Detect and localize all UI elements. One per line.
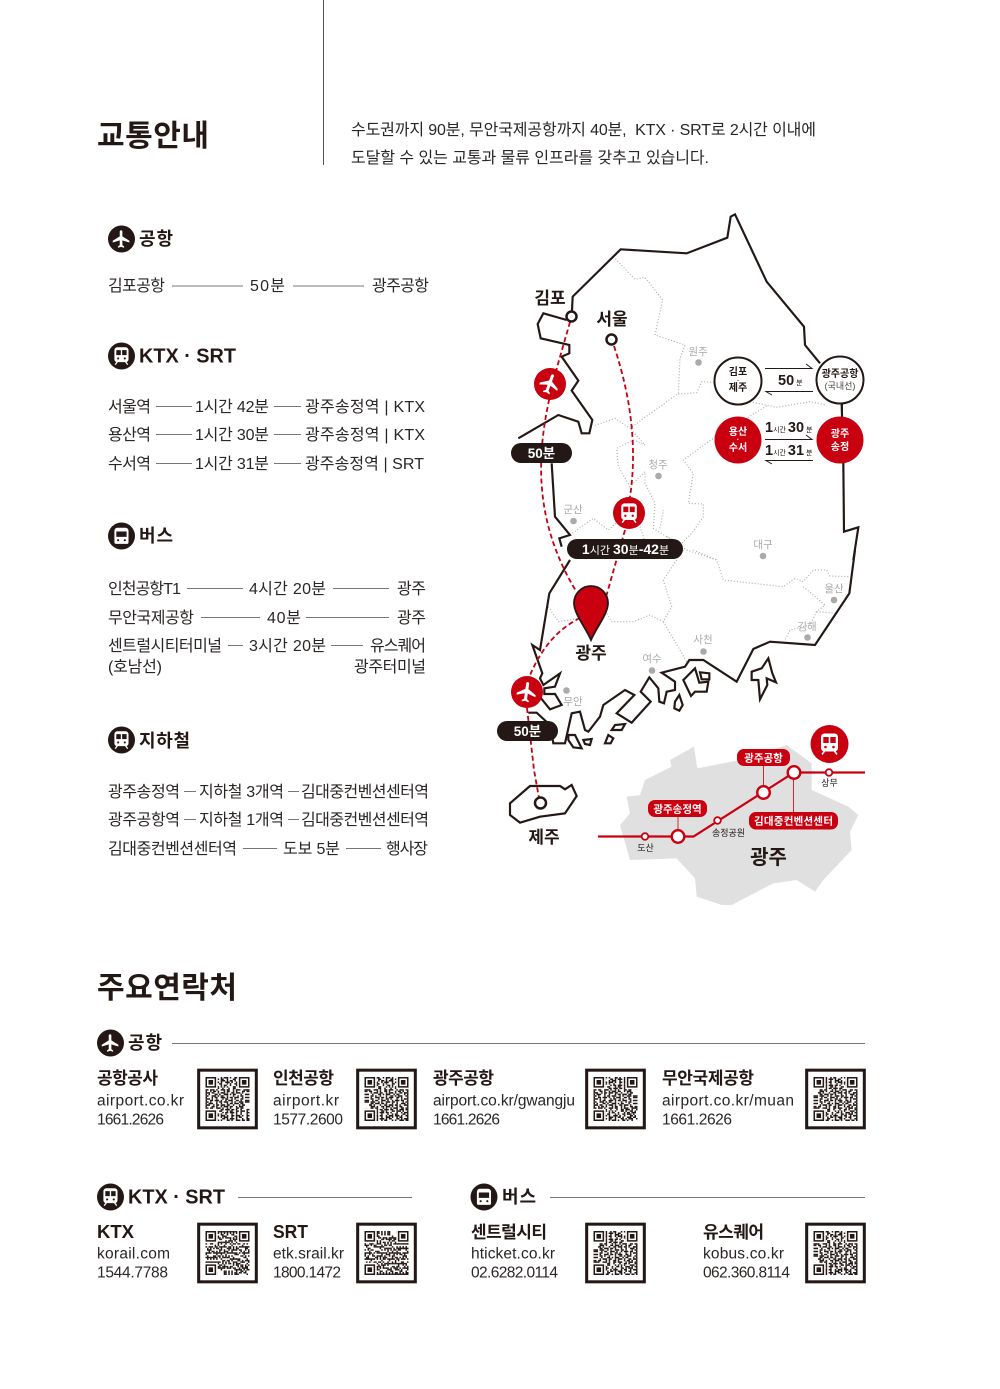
routes list: 지하철 3개역 xyxy=(199,783,284,801)
contact: 유스퀘어: kobus.co.kr xyxy=(703,1246,784,1262)
city markers: grey dots and labels: 사천 xyxy=(693,634,713,646)
marker: 서울: 서울 xyxy=(596,310,628,329)
marker: 서울 xyxy=(596,310,628,344)
marker: 광주 pin: 광주 xyxy=(575,644,607,663)
circle: 광주 송정 xyxy=(816,416,864,464)
routes list: 김대중컨벤션센터역 xyxy=(301,783,429,801)
routes list: 4시간 20분 xyxy=(249,580,326,598)
routes list: 서울역 xyxy=(108,398,151,416)
routes list: 광주공항역 xyxy=(108,811,180,829)
heading: 버스: 버스 xyxy=(502,1187,536,1207)
routes list: 광주송정역 | KTX xyxy=(305,398,425,416)
circle: 김포 제주: · xyxy=(736,375,740,385)
callout: 광주송정역 xyxy=(648,800,707,817)
panel: travel time key xyxy=(714,356,864,464)
city markers: grey dots and labels xyxy=(563,346,844,708)
qr: 유스퀘어 xyxy=(807,1224,864,1282)
contact: 공항공사: airport.co.kr xyxy=(97,1092,184,1110)
contact: 센트럴시티: 센트럴시티 xyxy=(471,1223,547,1242)
badge: 1시간 30분-42분: 1시간 30분-42분 xyxy=(582,541,669,557)
icon: train xyxy=(97,1184,124,1210)
routes list: 1시간 30분 xyxy=(195,426,269,444)
contact: 센트럴시티: hticket.co.kr xyxy=(471,1246,555,1262)
contact: 공항공사: 1661.2626 xyxy=(97,1112,164,1128)
heading: 공항: 공항 xyxy=(139,229,173,249)
connector segment xyxy=(841,403,843,420)
callout: 김대중컨벤션센터: 김대중컨벤션센터 xyxy=(754,814,833,828)
contact: KTX: korail.com xyxy=(97,1246,170,1262)
station labels: 송정공원 xyxy=(712,828,745,838)
qr: SRT xyxy=(358,1224,415,1282)
Gimpo to Gwangju coast outline xyxy=(518,214,858,560)
routes list: 유스퀘어 xyxy=(370,637,426,655)
panel: bus routes xyxy=(108,522,426,676)
label: 광주: 광주 xyxy=(750,846,787,869)
contact: KTX: KTX xyxy=(97,1221,135,1242)
icon: bus xyxy=(470,1184,498,1210)
intro text: 도달할 수 있는 교통과 물류 인프라를 갖추고 있습니다. xyxy=(351,149,709,167)
badge: 50분 north xyxy=(511,443,572,463)
badge: 50분 north: 50분 xyxy=(528,446,555,461)
marker: 김포: 김포 xyxy=(534,289,566,308)
heading: 버스: 버스 xyxy=(139,526,173,546)
city markers: grey dots and labels: 대구 xyxy=(753,539,773,551)
circle: 용산 수서: 용산 xyxy=(729,425,747,438)
station labels: 상무 xyxy=(821,778,838,788)
icon: plane xyxy=(108,226,135,252)
title: 주요연락처: 주요연락처 xyxy=(97,972,237,1005)
panel: Gwangju transit map xyxy=(598,725,865,905)
routes list: 광주 xyxy=(397,609,426,627)
panel: KTX SRT routes xyxy=(108,342,425,473)
intro text xyxy=(351,121,816,167)
contact: 유스퀘어: 유스퀘어 xyxy=(703,1223,764,1242)
divider xyxy=(550,1196,865,1198)
circle: 광주공항 국내선: (국내선) xyxy=(825,381,855,391)
qr: 광주공항 xyxy=(587,1070,644,1128)
duration: 1시간 31분: 1시간 31 분 xyxy=(765,443,813,459)
routes list: 무안국제공항 xyxy=(108,609,194,627)
routes list: 1시간 31분 xyxy=(195,455,269,473)
routes list xyxy=(108,580,426,676)
contact: 센트럴시티 xyxy=(471,1223,558,1282)
marker: 광주 pin xyxy=(574,586,608,663)
routes list: 지하철 1개역 xyxy=(199,811,284,829)
circle: 김포 제주: 제주 xyxy=(729,381,747,394)
routes list: 수서역 xyxy=(108,455,151,473)
circle: 광주 송정: 광주 xyxy=(831,428,849,440)
arrows and durations xyxy=(765,364,813,464)
city markers: grey dots and labels: 무안 xyxy=(563,696,583,708)
routes list: 인천공항T1 xyxy=(108,580,181,598)
routes list: 용산역 xyxy=(108,426,151,444)
contact: 인천공항 xyxy=(273,1069,343,1128)
route: 김포공항 to 광주공항: 김포공항 xyxy=(108,277,165,295)
panel: subway routes xyxy=(108,726,429,858)
route: 김포공항 to 광주공항 xyxy=(108,277,429,295)
contact: 무안국제공항: airport.co.kr/muan xyxy=(662,1092,794,1110)
station labels: 도산 xyxy=(637,843,654,853)
map regional boundaries, upper xyxy=(570,257,827,560)
icon: red plane south xyxy=(511,676,543,708)
contact: KTX xyxy=(97,1221,170,1282)
routes list: 광주송정역 | KTX xyxy=(305,426,425,444)
divider xyxy=(172,1042,865,1044)
icon: red train xyxy=(613,497,645,529)
heading: 지하철: 지하철 xyxy=(139,731,190,751)
contact: 유스퀘어 xyxy=(703,1223,790,1282)
marker: 김포 xyxy=(534,289,576,322)
callout: 광주공항 xyxy=(737,749,790,766)
circle: 김포 제주: 김포 xyxy=(729,366,747,378)
city markers: grey dots and labels: 군산 xyxy=(563,504,583,516)
qr: 공항공사 xyxy=(199,1070,256,1128)
routes list: (호남선) xyxy=(108,658,162,676)
contact: 인천공항: 1577.2600 xyxy=(273,1112,343,1128)
contact: SRT: 1800.1472 xyxy=(273,1264,341,1282)
panel: bus contacts xyxy=(470,1184,865,1282)
contact: 무안국제공항: 무안국제공항 xyxy=(662,1069,754,1088)
circle: 광주 송정: 송정 xyxy=(831,441,849,453)
routes list: 센트럴시티터미널 xyxy=(108,637,222,655)
contact: 공항공사 xyxy=(97,1069,184,1128)
icon: plane xyxy=(97,1030,124,1056)
routes list: 행사장 xyxy=(386,840,428,858)
route: 김포공항 to 광주공항: 광주공항 xyxy=(372,277,429,295)
qr: 무안국제공항 xyxy=(807,1070,864,1128)
contact: SRT: etk.srail.kr xyxy=(273,1246,344,1262)
qr: 센트럴시티 xyxy=(587,1224,644,1282)
badge: 50분 south xyxy=(497,721,558,741)
callout: 김대중컨벤션센터 xyxy=(749,812,838,830)
routes list xyxy=(108,398,425,473)
heading: KTX · SRT: KTX · SRT xyxy=(128,1186,225,1208)
qr: 인천공항 xyxy=(358,1070,415,1128)
city markers: grey dots and labels: 청주 xyxy=(648,459,668,471)
marker: 제주 xyxy=(528,798,560,847)
callout: 광주송정역: 광주송정역 xyxy=(653,802,702,816)
callout: 광주공항: 광주공항 xyxy=(744,752,783,764)
routes list: 광주송정역 xyxy=(108,783,180,801)
icon: bus xyxy=(108,522,135,550)
city markers: grey dots and labels: 김해 xyxy=(797,620,817,633)
contact: 광주공항: 1661.2626 xyxy=(433,1112,500,1128)
duration: 1시간 30분: 1시간 30 분 xyxy=(765,420,813,436)
contact: SRT: SRT xyxy=(273,1221,309,1242)
contact: 무안국제공항 xyxy=(662,1069,794,1128)
title: 교통안내: 교통안내 xyxy=(97,120,209,153)
routes list xyxy=(108,783,429,858)
stations xyxy=(642,766,832,843)
routes list: 3시간 20분 xyxy=(249,637,326,655)
contact: KTX: 1544.7788 xyxy=(97,1264,168,1282)
circle: 광주공항 국내선: 광주공항 xyxy=(822,367,858,380)
map regional boundaries, lower xyxy=(548,550,850,662)
Gwangju city shape xyxy=(620,745,858,905)
routes list: 도보 5분 xyxy=(283,841,340,858)
contact: SRT xyxy=(273,1221,344,1282)
heading: 공항: 공항 xyxy=(128,1033,162,1053)
routes list: 40분 xyxy=(267,610,301,627)
icon: red plane north xyxy=(534,368,566,400)
icon: train xyxy=(108,342,135,370)
badge: 50분 south: 50분 xyxy=(514,724,541,739)
icon: subway red xyxy=(810,725,848,763)
divider xyxy=(238,1196,412,1198)
red dashed routes xyxy=(527,322,633,798)
icon: subway xyxy=(108,726,135,754)
south coast and islands xyxy=(510,550,855,823)
routes list: 광주터미널 xyxy=(354,658,426,676)
circle: 용산 수서 xyxy=(714,416,762,464)
circle: 용산 수서: 수서 xyxy=(729,441,747,454)
route: 김포공항 to 광주공항: 50분 xyxy=(250,278,285,295)
contact: 인천공항: 인천공항 xyxy=(273,1069,334,1088)
city markers: grey dots and labels: 원주 xyxy=(688,346,708,358)
circle: 김포 제주 xyxy=(714,358,762,404)
marker: 제주: 제주 xyxy=(528,828,560,847)
contact: 광주공항: 광주공항 xyxy=(433,1069,494,1088)
header divider line xyxy=(322,0,324,165)
subway line xyxy=(598,772,865,836)
callout stems xyxy=(678,766,794,836)
circle: 용산 수서: · xyxy=(737,435,739,444)
badge: 1시간 30분-42분 xyxy=(567,539,683,559)
panel: airport routes xyxy=(108,226,429,295)
duration: 50분: 50 분 xyxy=(778,373,803,389)
heading: KTX · SRT: KTX · SRT xyxy=(139,346,236,368)
contact: 센트럴시티: 02.6282.0114 xyxy=(471,1264,558,1282)
routes list: 1시간 42분 xyxy=(195,398,269,416)
qr: KTX xyxy=(199,1224,256,1282)
routes list: 광주 xyxy=(397,580,426,598)
city markers: grey dots and labels: 여수 xyxy=(642,653,662,665)
contact: 유스퀘어: 062.360.8114 xyxy=(703,1264,790,1282)
routes list: 김대중컨벤션센터역 xyxy=(301,811,429,829)
contact: 공항공사: 공항공사 xyxy=(97,1069,158,1088)
routes list: 광주송정역 | SRT xyxy=(305,455,424,473)
contact: 인천공항: airport.kr xyxy=(273,1092,339,1110)
circle: 광주공항 국내선 xyxy=(816,356,864,404)
panel: airport contacts xyxy=(97,1030,865,1128)
city markers: grey dots and labels: 울산 xyxy=(824,583,844,595)
map: Korea route map xyxy=(497,214,858,847)
contact: 광주공항 xyxy=(433,1069,575,1128)
intro text: 수도권까지 90분, 무안국제공항까지 40분, KTX · SRT로 2시간 이내에 xyxy=(351,121,816,139)
station labels xyxy=(637,778,838,853)
panel: KTX SRT contacts xyxy=(97,1184,415,1282)
contact: 무안국제공항: 1661.2626 xyxy=(662,1112,732,1128)
contact: 광주공항: airport.co.kr/gwangju xyxy=(433,1092,575,1110)
routes list: 김대중컨벤션센터역 xyxy=(108,840,237,858)
